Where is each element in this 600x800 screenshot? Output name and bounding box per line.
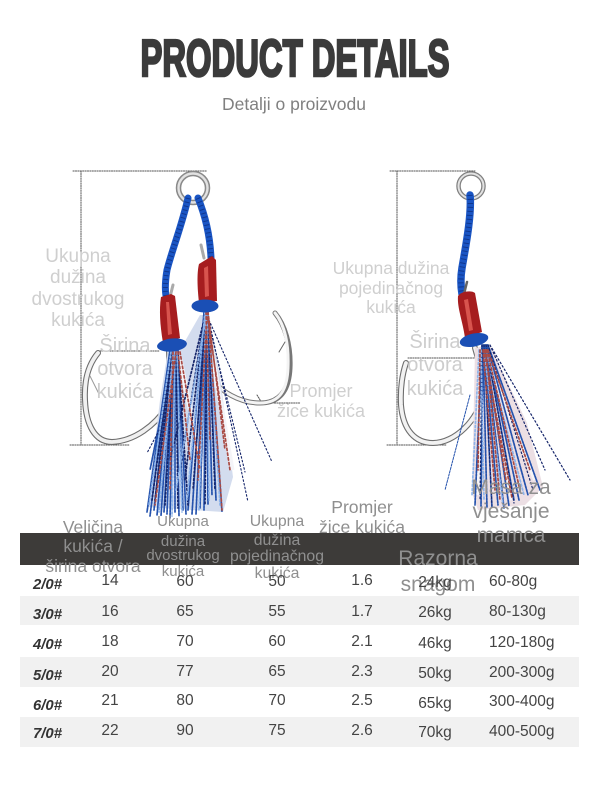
annotation: double hook gap width: Širina — [99, 334, 151, 357]
double hook illustration — [70, 171, 300, 518]
annotation: single hook total length: Ukupna dužina — [333, 258, 450, 278]
breaking strength column: 24kg — [418, 574, 452, 591]
single hook length column — [268, 573, 286, 739]
column headers: Masa za — [471, 476, 551, 499]
annotation: double hook total length — [32, 246, 124, 331]
blue cord — [461, 195, 470, 294]
annotation: wire diameter: žice kukića — [277, 401, 366, 421]
single hook length column: 55 — [268, 603, 286, 620]
annotation: single hook gap width — [407, 330, 464, 400]
column headers: Ukupna — [157, 513, 210, 530]
annotation: double hook total length: Ukupna — [45, 246, 111, 267]
lure weight column: 60-80g — [489, 573, 537, 590]
wire diameter column: 2.5 — [351, 692, 373, 709]
annotation: double hook gap width: kukića — [97, 381, 154, 403]
red tubes — [160, 256, 217, 343]
breaking strength column: 65kg — [418, 695, 452, 712]
wire diameter column: 2.3 — [351, 663, 373, 680]
column headers: mamca — [477, 524, 546, 547]
breaking strength column: 50kg — [418, 665, 452, 682]
annotation: double hook total length: kukića — [51, 310, 105, 331]
single hook length column: 60 — [268, 633, 286, 650]
size column: 7/0# — [33, 725, 63, 742]
size column: 6/0# — [33, 697, 63, 714]
blue cords — [165, 198, 211, 296]
annotation: wire diameter — [277, 381, 366, 421]
single hook length column: 70 — [268, 692, 286, 709]
column headers: kukića — [255, 565, 300, 582]
red tube — [458, 291, 482, 338]
hook — [401, 348, 483, 443]
column headers: dvostrukog — [146, 547, 220, 564]
breaking strength column: 70kg — [418, 724, 452, 741]
icon: split ring — [178, 174, 208, 202]
gap width column: 21 — [101, 692, 119, 709]
row stripes — [20, 596, 579, 747]
column headers: snagom — [401, 573, 475, 596]
column headers: Ukupna — [250, 513, 304, 530]
breaking strength column — [418, 574, 452, 741]
double hook length column: 65 — [176, 603, 194, 620]
column headers: dužina — [161, 533, 206, 550]
single hook length column: 50 — [268, 573, 286, 590]
column headers: vješanje — [472, 500, 550, 523]
annotation: single hook gap width: kukića — [407, 378, 464, 400]
wire diameter column: 2.6 — [351, 722, 373, 739]
column headers: Promjer — [331, 497, 393, 517]
size column: 4/0# — [32, 636, 63, 653]
gap width column: 18 — [101, 633, 119, 650]
annotation: single hook total length: pojedinačnog — [339, 278, 443, 298]
column headers: kukića — [162, 563, 205, 580]
annotation: single hook total length: kukića — [366, 297, 416, 317]
single hook length column: 75 — [268, 722, 286, 739]
column headers: pojedinačnog — [230, 548, 324, 565]
double hook length column: 60 — [176, 573, 194, 590]
tassel: double hook — [147, 312, 272, 518]
double hook length column: 77 — [176, 663, 194, 680]
annotation: double hook total length: dužina — [50, 267, 106, 288]
table header bar — [20, 533, 579, 565]
column headers — [45, 476, 551, 596]
lure weight column: 400-500g — [489, 723, 555, 740]
subtitle: Detalji o proizvodu — [222, 94, 366, 114]
size column — [32, 576, 63, 742]
annotation: double hook gap width: otvora — [97, 358, 154, 380]
double hook length column — [176, 573, 194, 739]
right hook — [206, 313, 290, 403]
blue knot — [458, 331, 490, 349]
gap width column: 22 — [101, 722, 119, 739]
single hook illustration — [387, 171, 570, 510]
dimension lines: single hook — [387, 171, 475, 445]
double hook length column: 90 — [176, 722, 194, 739]
lure weight column — [489, 573, 555, 740]
annotation: single hook gap width: Širina — [409, 330, 461, 353]
wire diameter column: 1.7 — [351, 603, 373, 620]
column headers: Razorna — [398, 547, 478, 570]
breaking strength column: 26kg — [418, 604, 452, 621]
hook eye — [464, 282, 467, 294]
hook eyes — [170, 245, 204, 297]
size column: 5/0# — [33, 667, 63, 684]
gap width column — [101, 572, 119, 739]
lure weight column: 80-130g — [489, 603, 546, 620]
column headers: dužina — [254, 532, 300, 549]
annotation: double hook gap width — [97, 334, 154, 403]
blue knots — [156, 300, 218, 353]
double hook length column: 80 — [176, 692, 194, 709]
dimension lines: double hook — [70, 171, 300, 445]
single hook length column: 65 — [268, 663, 286, 680]
wire diameter column — [351, 572, 373, 739]
column headers: Veličina — [63, 517, 123, 537]
column headers: širina otvora — [45, 556, 141, 576]
gap width column: 14 — [101, 572, 119, 589]
annotation: wire diameter: Promjer — [289, 381, 353, 401]
lure weight column: 300-400g — [489, 693, 555, 710]
lure weight column: 200-300g — [489, 664, 555, 681]
annotation: double hook total length: dvostrukog — [32, 289, 124, 310]
annotation: single hook gap width: otvora — [407, 354, 464, 376]
size column: 2/0# — [32, 576, 63, 593]
annotation: single hook total length — [333, 258, 450, 317]
tassel: single hook — [445, 345, 570, 510]
size column: 3/0# — [33, 606, 63, 623]
wire diameter column: 2.1 — [351, 633, 373, 650]
gap width column: 20 — [101, 663, 119, 680]
left hook — [85, 350, 170, 442]
double hook length column: 70 — [176, 633, 194, 650]
wire diameter column: 1.6 — [351, 572, 373, 589]
column headers: kukića / — [63, 536, 123, 556]
gap width column: 16 — [101, 603, 119, 620]
icon: split ring — [458, 174, 484, 198]
breaking strength column: 46kg — [418, 635, 452, 652]
size table — [20, 476, 579, 747]
column headers: žice kukića — [319, 517, 405, 537]
lure weight column: 120-180g — [489, 634, 555, 651]
